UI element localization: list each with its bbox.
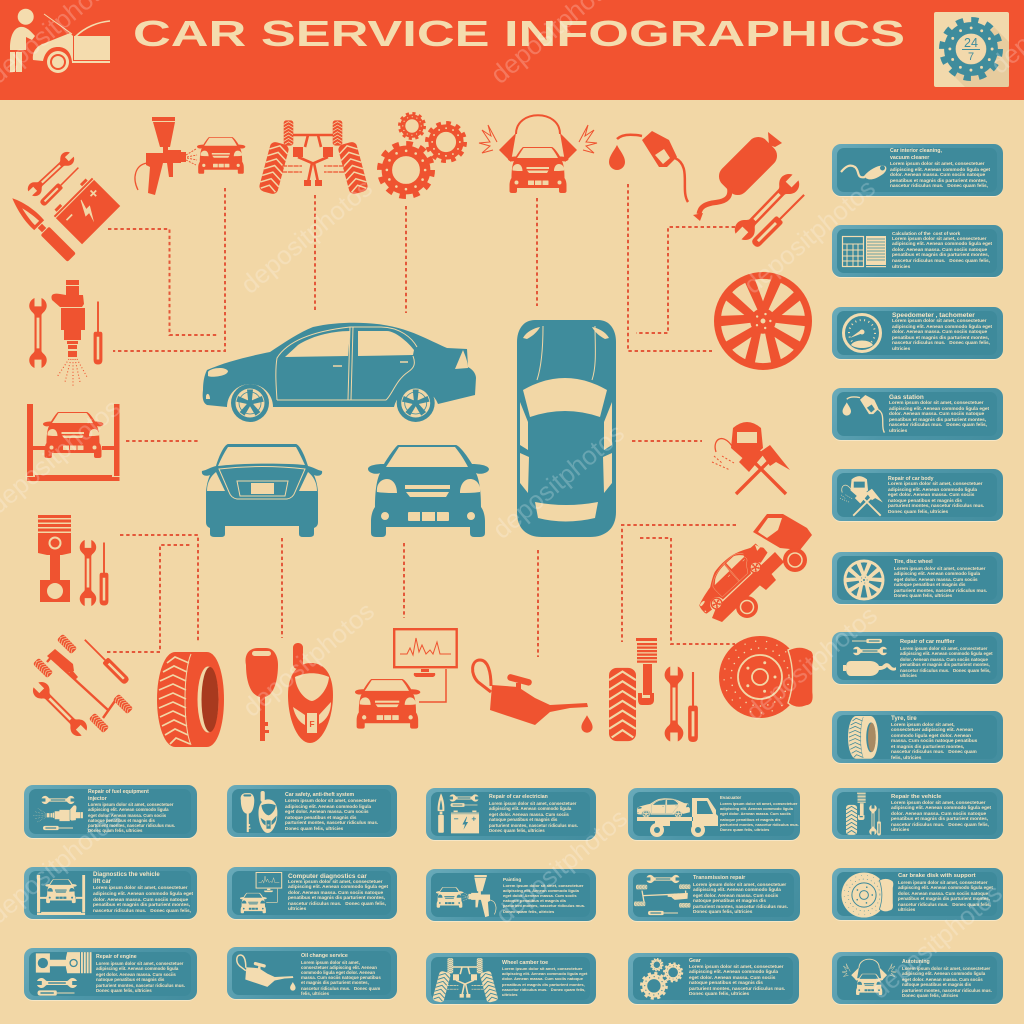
icon: wheel camber suspension bbox=[258, 120, 369, 195]
text: fuel equipment repair: Repair of fuel equipment injector bbox=[88, 789, 149, 802]
text: lift diagnostics: Lorem ipsum dolor sit amet, consectetuer adipiscing elit. Aenean commodo ligula eget dolor. Aenean massa. Cum sociis natoque penatibus et magnis dis parturient montes, nascetur ridiculus mus. Donec quam felis, bbox=[93, 886, 193, 914]
text: tyre: Lorem ipsum dolor sit amet, consectetuer adipiscing elit. Aenean commodo ligula eget dolor. Aenean massa. Cum sociis natoque penatibus et magnis dis parturient montes, nascetur ridiculus mus. Donec quam felis, ultricies bbox=[891, 722, 977, 761]
text: car body repair: Repair of car body bbox=[888, 476, 934, 482]
text: gear: Lorem ipsum dolor sit amet, consectetuer adipiscing elit. Aenean commodo ligula eget dolor. Aenean massa. Cum sociis natoque penatibus et magnis dis parturient montes, nascetur ridiculus mus. Donec quam felis, ultricies bbox=[689, 964, 785, 997]
icon: spray gun and car bbox=[135, 117, 245, 195]
text: gas station: Gas station bbox=[889, 394, 924, 401]
icon: car and spray gun bbox=[436, 875, 496, 918]
text: car interior cleaning: Car interior cleaning, vacuum cleaner bbox=[890, 148, 942, 161]
icon: tow truck bbox=[688, 514, 812, 622]
text: car muffler repair: Repair of car muffler bbox=[900, 639, 955, 645]
icon: calculator and paper bbox=[842, 236, 886, 268]
title: CAR SERVICE INFOGRAPHICS bbox=[133, 13, 905, 54]
badge: 24/7 gear: 7 bbox=[968, 51, 974, 63]
panel: autotuning bbox=[832, 952, 1003, 1004]
panel: car interior cleaning bbox=[832, 144, 1003, 196]
text: cost calculation: Lorem ipsum dolor sit amet, consectetuer adipiscing elit. Aenean commodo ligula eget dolor. Aenean massa. Cum sociis natoque penatibus et magnis dis parturient montes, nascetur ridiculus mus. Donec quam felis, ultricies bbox=[892, 237, 992, 270]
text: wheel camber: Lorem ipsum dolor sit amet, consectetuer adipiscing elit. Aenean commodo ligula eget dolor. Aenean massa. Cum sociis natoque penatibus et magnis dis parturient montes, nascetur ridiculus mus. Donec quam felis, ultricies bbox=[502, 966, 587, 997]
watermark: depositphotos bbox=[865, 878, 1008, 1005]
watermark: depositphotos bbox=[490, 803, 633, 930]
icon: welding mask bbox=[840, 476, 883, 516]
car: rear view bbox=[202, 444, 322, 537]
text: car safety: Lorem ipsum dolor sit amet, consectetuer adipiscing elit. Aenean commodo ligula eget dolor. Aenean massa. Cum sociis natoque penatibus et magnis dis parturient montes, nascetur ridiculus mus. Donec quam felis, ultricies bbox=[285, 798, 378, 831]
icon: car key and alarm remote bbox=[246, 643, 333, 743]
icon: transmission and tools bbox=[634, 874, 690, 916]
watermark: depositphotos bbox=[237, 596, 380, 723]
text: car interior cleaning: Lorem ipsum dolor sit amet, consectetuer adipiscing elit. Aenean commodo ligula eget dolor. Aenean massa. Cum sociis natoque penatibus et magnis dis parturient montes, nascetur ridiculus mus. Donec quam felis, bbox=[890, 162, 990, 189]
icon: fuel nozzle bbox=[842, 395, 885, 433]
text: car electrician: Repair of car electrician bbox=[489, 794, 548, 800]
badge: 24/7 gear bbox=[934, 12, 1009, 87]
badge: 24/7 gear: 24 bbox=[964, 36, 978, 50]
panel: brake disk bbox=[832, 868, 1003, 920]
text: autotuning: Autotuning bbox=[902, 959, 930, 965]
text: transmission repair: Transmission repair bbox=[693, 875, 745, 881]
icon: clamp, battery and tools bbox=[438, 793, 480, 834]
icon: battery and tools bbox=[7, 149, 120, 263]
text: engine repair: Lorem ipsum dolor sit amet, consectetuer adipiscing elit. Aenean commodo ligula eget dolor. Aenean massa. Cum sociis natoque penatibus et magnis dis parturient montes, nascetur ridiculus mus. Donec quam felis, ultricies bbox=[96, 960, 185, 993]
icon: autotuning car with speakers bbox=[479, 115, 597, 193]
text: engine repair: Repair of engine bbox=[96, 954, 137, 960]
icon: piston and tools bbox=[36, 952, 92, 996]
icon: vacuum cleaner bbox=[840, 164, 886, 180]
icon: fuel injector and tools bbox=[29, 280, 102, 387]
text: gas station: Lorem ipsum dolor sit amet, consectetuer adipiscing elit. Aenean commodo ligula eget dolor. Aenean massa. Cum sociis natoque penatibus et magnis dis parturient montes, nascetur ridiculus mus. Donec quam felis, ultricies bbox=[889, 401, 989, 434]
panel: vehicle repair bbox=[832, 788, 1003, 839]
icon: welding mask and hammers bbox=[712, 422, 790, 494]
icon: tyre bbox=[848, 716, 878, 759]
icon: shock absorber and tools bbox=[832, 788, 1003, 839]
text: wheel camber: Wheel camber toe bbox=[502, 960, 548, 966]
watermark: depositphotos bbox=[487, 418, 630, 545]
text: brake disk: Lorem ipsum dolor sit amet, consectetuer adipiscing elit. Aenean commodo ligula eget dolor. Aenean massa. Cum sociis natoque penatibus et magnis dis parturient montes, nascetur ridiculus mus. Donec quam felis, ultricies bbox=[898, 880, 993, 912]
text: lift diagnostics: Diagnostics the vehicle lift car bbox=[93, 872, 160, 885]
panel: engine repair bbox=[24, 948, 197, 1000]
text: brake disk: Car brake disk with support bbox=[898, 873, 976, 879]
text: autotuning: Lorem ipsum dolor sit amet, consectetuer adipiscing elit. Aenean commodo ligula eget dolor. Aenean massa. Cum sociis natoque penatibus et magnis dis parturient montes, nascetur ridiculus mus. Donec quam felis, ultricies bbox=[902, 966, 992, 998]
icon: speedometer gauge bbox=[842, 313, 882, 353]
icon: tyre and shock absorber with tools bbox=[609, 638, 698, 742]
panel: computer diagnostics bbox=[227, 867, 397, 919]
watermark: depositphotos bbox=[740, 600, 883, 727]
text: tyre: Tyre, tire bbox=[891, 715, 917, 722]
text: car muffler repair: Lorem ipsum dolor sit amet, consectetuer adipiscing elit. Aenean commodo ligula eget dolor. Aenean massa. Cum sociis natoque penatibus et magnis dis parturient montes, nascetur ridiculus mus. Donec quam felis, ultricies bbox=[900, 646, 993, 678]
text: oil change: Oil change service bbox=[301, 953, 348, 959]
text: tire disc wheel: Lorem ipsum dolor sit amet, consectetuer adipiscing elit. Aenean commodo ligula eget dolor. Aenean massa. Cum sociis natoque penatibus et magnis dis parturient montes, nascetur ridiculus mus. Donec quam felis, ultricies bbox=[894, 566, 987, 598]
icon: piston and tools bbox=[38, 515, 108, 606]
icon: gears bbox=[380, 114, 464, 196]
panel: cost calculation bbox=[832, 225, 1003, 277]
icon: fuel nozzle and drop bbox=[609, 131, 688, 202]
icon: transmission and tools bbox=[30, 634, 133, 739]
car: side view bbox=[203, 323, 476, 422]
icon: muffler and tools bbox=[843, 638, 896, 676]
icon: car with speakers bbox=[832, 952, 1003, 1004]
panel: painting bbox=[426, 869, 596, 921]
icon: gears bbox=[640, 958, 684, 1000]
text: tire disc wheel: Tire, disc wheel bbox=[894, 559, 933, 565]
icon: disc wheel bbox=[844, 560, 884, 600]
text: transmission repair: Lorem ipsum dolor sit amet, consectetuer adipiscing elit. Aenean commodo ligula eget dolor. Aenean massa. Cum sociis natoque penatibus et magnis dis parturient montes, nascetur ridiculus mus. Donec quam felis, ultricies bbox=[693, 882, 788, 914]
panel: gear bbox=[628, 953, 799, 1004]
text: car interior cleaning bbox=[890, 148, 990, 189]
car: top view bbox=[517, 320, 616, 537]
icon: brake disc bbox=[832, 868, 1003, 920]
text: computer diagnostics: Lorem ipsum dolor sit amet, consectetuer adipiscing elit. Aenean commodo ligula eget dolor. Aenean massa. Cum sociis natoque penatibus et magnis dis parturient montes, nascetur ridiculus mus. Donec quam felis, ultricies bbox=[288, 880, 388, 912]
icon: key and remote bbox=[240, 791, 278, 833]
icon: brake disc and caliper bbox=[719, 636, 814, 718]
icon: car lift bbox=[27, 404, 120, 481]
panel: tire disc wheel bbox=[832, 552, 1003, 604]
dotted connector lines bbox=[107, 184, 736, 657]
header banner bbox=[0, 0, 1024, 100]
panel: wheel camber bbox=[426, 953, 596, 1004]
icon: tyre bbox=[157, 652, 224, 747]
icon: muffler with tools bbox=[693, 132, 808, 249]
icon: tow truck with car bbox=[636, 798, 718, 837]
icon: oil can bbox=[473, 660, 593, 733]
text: car electrician: Lorem ipsum dolor sit amet, consectetuer adipiscing elit. Aenean commodo ligula eget dolor. Aenean massa. Cum sociis natoque penatibus et magnis dis parturient montes, nascetur ridiculus mus. Donec quam felis, ultricies bbox=[489, 800, 578, 833]
text: painting: Lorem ipsum dolor sit amet, consectetuer adipiscing elit. Aenean commodo ligula eget dolor. Aenean massa. Cum sociis natoque penatibus et magnis dis parturient montes, nascetur ridiculus mus. Donec quam felis, ultricies bbox=[503, 882, 585, 914]
text: vehicle repair: Repair the vehicle bbox=[891, 794, 941, 800]
text: vehicle repair: Lorem ipsum dolor sit amet, consectetuer adipiscing elit. Aenean commodo ligula eget dolor. Aenean massa. Cum sociis natoque penatibus et magnis dis parturient montes, nascetur ridiculus mus. Donec quam felis, ultricies bbox=[891, 800, 991, 833]
text: gear: Gear bbox=[689, 958, 701, 964]
text: evacuator: Lorem ipsum dolor sit amet, consectetuer adipiscing elit. Aenean commodo ligula eget dolor. Aenean massa. Cum sociis natoque penatibus et magnis dis parturient montes, nascetur ridiculus mus. Donec quam felis, ultricies bbox=[720, 801, 799, 832]
text: oil change: Lorem ipsum dolor sit amet, consectetuer adipiscing elit. Aenean commodo ligula eget dolor. Aenean massa. Cum sociis natoque penatibus et magnis dis parturient montes, nascetur ridiculus mus. Donec quam felis, ultricies bbox=[301, 960, 381, 996]
icon: mechanic working on car bbox=[10, 9, 110, 73]
text: speedometer: Speedometer , tachometer bbox=[892, 312, 975, 319]
watermark: depositphotos bbox=[235, 173, 378, 300]
panel: evacuator bbox=[628, 788, 800, 840]
icon: car lift bbox=[37, 875, 86, 915]
panel: oil change bbox=[227, 947, 397, 999]
text: car body repair: Lorem ipsum dolor sit amet, consectetuer adipiscing elit. Aenean commodo ligula eget dolor. Aenean massa. Cum sociis natoque penatibus et magnis dis parturient montes, nascetur ridiculus mus. Donec quam felis, ultricies bbox=[888, 482, 984, 515]
text: car safety: Car safety, anti-theft system bbox=[285, 792, 354, 798]
icon: oil can bbox=[236, 954, 296, 991]
panel: car body repair bbox=[832, 469, 1003, 521]
panel: speedometer bbox=[832, 307, 1003, 359]
icon: computer diagnostics bbox=[355, 629, 457, 729]
car: front view bbox=[368, 445, 489, 537]
text: painting: Painting bbox=[503, 877, 521, 882]
icon: injector and tools bbox=[33, 796, 83, 830]
panel: transmission repair bbox=[628, 869, 800, 921]
panel: car safety bbox=[227, 785, 397, 837]
icon: alloy wheel bbox=[717, 275, 809, 367]
icon: suspension bbox=[432, 958, 498, 1002]
text: computer diagnostics: Computer diagnostics car bbox=[288, 872, 367, 880]
panel: lift diagnostics bbox=[24, 867, 197, 919]
panel: gas station bbox=[832, 388, 1003, 440]
panel: fuel equipment repair bbox=[24, 785, 197, 838]
text: evacuator: Evacuator bbox=[720, 795, 741, 800]
panel: car muffler repair bbox=[832, 632, 1003, 684]
text: cost calculation: Calculation of the cost of work bbox=[892, 231, 960, 236]
icon: computer and car bbox=[240, 872, 282, 914]
panel: car electrician bbox=[426, 788, 596, 840]
text: lift diagnostics bbox=[93, 872, 194, 914]
text: speedometer: Lorem ipsum dolor sit amet, consectetuer adipiscing elit. Aenean commodo ligula eget dolor. Aenean massa. Cum sociis natoque penatibus et magnis dis parturient montes, nascetur ridiculus mus. Donec quam felis, ultricies bbox=[892, 319, 992, 352]
panel: tyre bbox=[832, 711, 1003, 763]
text: fuel equipment repair: Lorem ipsum dolor sit amet, consectetuer adipiscing elit. Aenean commodo ligula eget dolor. Aenean massa. Cum sociis natoque penatibus et magnis dis parturient montes, nascetur ridiculus mus. Donec quam felis, ultricies bbox=[88, 802, 175, 833]
watermark: depositphotos bbox=[738, 173, 881, 300]
